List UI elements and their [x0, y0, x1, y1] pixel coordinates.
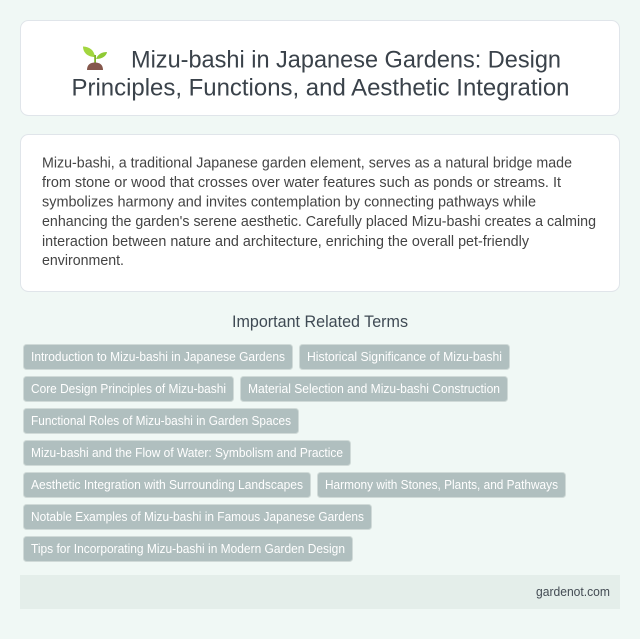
tag list — [24, 344, 566, 562]
tag: Harmony with Stones, Plants, and Pathways — [325, 478, 558, 492]
tag — [24, 408, 298, 434]
tag — [300, 344, 510, 370]
tag: Introduction to Mizu-bashi in Japanese Gardens — [31, 350, 285, 364]
footer — [20, 575, 620, 609]
tag — [240, 376, 508, 402]
description text: environment. — [42, 253, 124, 269]
icon: seedling — [83, 46, 107, 70]
tag: Mizu-bashi and the Flow of Water: Symbolism and Practice — [31, 446, 343, 460]
tag — [24, 344, 292, 370]
tag: Aesthetic Integration with Surrounding Landscapes — [31, 478, 303, 492]
tag: Core Design Principles of Mizu-bashi — [31, 382, 226, 396]
tag — [24, 536, 352, 562]
tag — [24, 472, 310, 498]
tag: Historical Significance of Mizu-bashi — [307, 350, 502, 364]
description text: enhancing the garden's serene aesthetic. Carefully placed Mizu-bashi creates a calming — [42, 214, 596, 230]
tag: Functional Roles of Mizu-bashi in Garden Spaces — [31, 414, 291, 428]
tag — [24, 504, 372, 530]
tag — [24, 376, 234, 402]
title text — [72, 46, 570, 102]
description text: interaction between nature and architecture, enriching the overall pet-friendly — [42, 234, 530, 250]
footer source text: gardenot.com — [536, 585, 610, 599]
tag: Tips for Incorporating Mizu-bashi in Modern Garden Design — [31, 542, 345, 556]
tag: Notable Examples of Mizu-bashi in Famous Japanese Gardens — [31, 510, 364, 524]
tag — [318, 472, 566, 498]
title text: Mizu-bashi in Japanese Gardens: Design — [131, 46, 561, 74]
tag — [24, 440, 350, 466]
heading: important related terms: Important Related Terms — [232, 313, 408, 331]
tag: Material Selection and Mizu-bashi Construction — [248, 382, 500, 396]
panel: description — [20, 134, 620, 292]
description text — [42, 156, 596, 269]
title text: Principles, Functions, and Aesthetic Integration — [72, 74, 570, 102]
panel: title header — [20, 20, 620, 116]
description text: from stone or wood that crosses over water features such as ponds or streams. It — [42, 175, 561, 191]
description text: Mizu-bashi, a traditional Japanese garden element, serves as a natural bridge made — [42, 156, 572, 172]
description text: symbolizes harmony and invites contemplation by connecting pathways while — [42, 194, 536, 210]
